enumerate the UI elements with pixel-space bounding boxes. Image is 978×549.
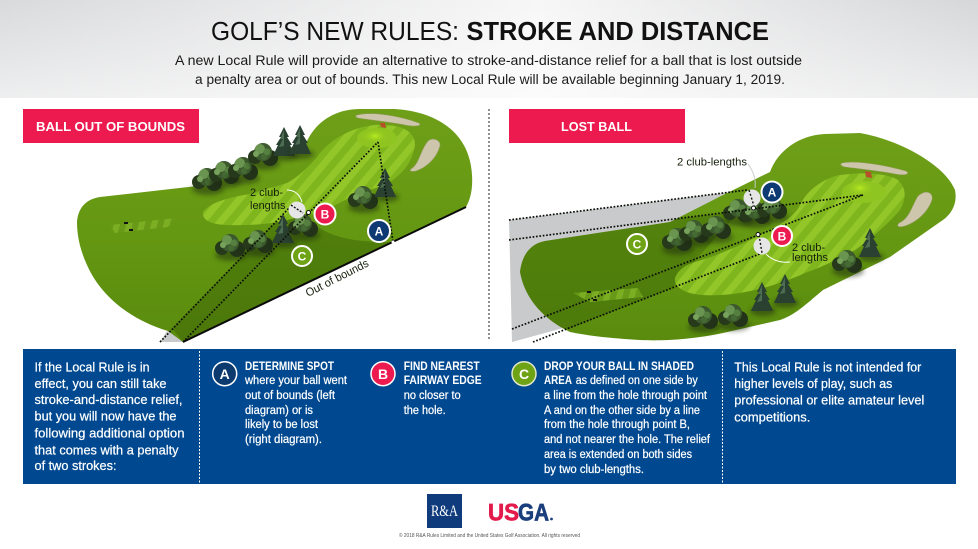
step A text: likely to be lost	[245, 419, 319, 431]
step A text: diagram) or is	[245, 405, 313, 417]
out of bounds label: Out of bounds	[304, 258, 371, 300]
copyright: © 2018 R&A Rules Limited and the United States Golf Association. All rights reserved	[399, 532, 580, 539]
flag	[865, 171, 872, 178]
flag	[380, 123, 386, 128]
step B text: FIND NEAREST	[404, 361, 480, 373]
step C icon: C	[519, 366, 529, 382]
title: STROKE AND DISTANCE	[466, 18, 769, 46]
two club-lengths label: lengths	[250, 200, 286, 212]
heading: lost ball	[509, 109, 685, 143]
step A text: (right diagram).	[245, 434, 322, 446]
heading: lost ball: LOST BALL	[561, 119, 632, 134]
logo: R&A	[427, 494, 462, 528]
step A icon	[213, 362, 237, 386]
relief boundary lines	[509, 190, 863, 342]
marker B: B	[321, 208, 330, 222]
trees	[662, 196, 884, 333]
two club-lengths label A	[677, 156, 755, 188]
step C text: by two club-lengths.	[544, 464, 644, 476]
relief boundary lines	[160, 142, 393, 342]
step B text: no closer to	[404, 390, 461, 402]
marker C	[627, 234, 647, 254]
panel text: intro	[34, 360, 184, 473]
panel text: scope note: professional or elite amateur level	[734, 392, 924, 408]
putting green	[842, 179, 886, 203]
intro text: a penalty area or out of bounds. This new Local Rule will be available beginning January 1, 2019.	[195, 72, 785, 87]
step A text: out of bounds (left	[245, 390, 336, 402]
marker B	[772, 226, 792, 246]
panel text: scope note: competitions.	[734, 410, 810, 424]
diagram: lost ball course	[509, 133, 956, 343]
blue info panel	[23, 349, 956, 484]
panel text: intro: If the Local Rule is in	[34, 360, 150, 374]
step B icon: B	[378, 366, 388, 382]
logo: USGA	[488, 500, 553, 526]
step C text: and not nearer the hole. The relief	[544, 434, 711, 446]
step C text: AREA	[544, 375, 572, 387]
step C text: as defined on one side by	[576, 375, 698, 387]
step B icon	[371, 362, 395, 386]
logo: USGA: GA	[518, 500, 549, 526]
panel text: intro: of two strokes:	[34, 458, 116, 473]
club-length circle	[288, 202, 394, 244]
intro text: A new Local Rule will provide an alternative to stroke-and-distance relief for a ball that is lost outside	[175, 53, 802, 68]
panel text: intro: that comes with a penalty	[34, 442, 179, 458]
two club-lengths label B	[766, 242, 828, 264]
title	[211, 18, 769, 46]
fairway	[675, 173, 905, 295]
marker C: C	[633, 238, 642, 252]
step B text: FAIRWAY EDGE	[404, 375, 482, 387]
tee box	[110, 218, 176, 233]
panel text: intro: effect, you can still take	[34, 376, 166, 391]
two club-lengths label B: 2 club-	[792, 242, 825, 254]
logo: USGA: US	[488, 500, 519, 526]
shaded relief area	[520, 214, 732, 330]
shaded relief area	[172, 205, 393, 342]
two club-lengths label	[250, 187, 302, 212]
step A icon: A	[220, 366, 230, 382]
panel text: scope note	[734, 360, 924, 424]
course turf	[520, 133, 956, 340]
putting green	[357, 128, 397, 148]
panel text: scope note: This Local Rule is not intended for	[734, 360, 922, 374]
panel text: scope note: higher levels of play, such as	[734, 376, 892, 391]
title: GOLF’S NEW RULES:	[211, 18, 459, 46]
out of bounds line	[183, 207, 466, 342]
step C text: a line from the hole through point	[544, 390, 708, 402]
bunkers	[841, 162, 932, 227]
marker C	[292, 246, 312, 266]
panel text: intro: stroke-and-distance relief,	[34, 392, 182, 407]
step C text: A and on the other side by a line	[544, 405, 700, 417]
marker B: B	[778, 230, 787, 244]
trees	[192, 125, 399, 261]
club-length circle at B	[754, 232, 770, 254]
step C text: DROP YOUR BALL IN SHADED	[544, 361, 694, 373]
tee box	[573, 288, 643, 302]
heading: ball out of bounds: BALL OUT OF BOUNDS	[36, 119, 185, 134]
marker C: C	[298, 250, 307, 264]
step B text	[404, 361, 482, 417]
marker A: A	[768, 186, 777, 200]
step C text	[544, 361, 711, 476]
heading: ball out of bounds	[23, 109, 199, 143]
marker B	[314, 204, 336, 224]
step A text	[244, 361, 348, 446]
panel text: intro: but you will now have the	[34, 408, 176, 424]
panel text: intro: following additional option	[34, 426, 184, 440]
two club-lengths label B: lengths	[792, 252, 828, 264]
header band	[0, 0, 978, 98]
step B text: the hole.	[404, 405, 446, 417]
club-length circle at A	[744, 190, 760, 210]
step A text: DETERMINE SPOT	[245, 361, 334, 373]
marker A	[762, 182, 782, 202]
marker A	[368, 220, 390, 242]
fairway	[203, 125, 415, 225]
bunkers	[356, 114, 440, 171]
diagram: ball out of bounds course	[77, 109, 472, 342]
logo: R&A: R&A	[431, 503, 459, 520]
relief area grey extension	[509, 190, 747, 342]
step C text: area is extended on both sides	[544, 449, 692, 461]
relief area grey extension	[160, 331, 204, 342]
step C text: from the hole through point B,	[544, 419, 690, 431]
course turf	[77, 109, 472, 342]
intro text	[175, 53, 802, 87]
step C icon	[512, 362, 536, 386]
two club-lengths label: 2 club-	[250, 187, 283, 199]
step A text: where your ball went	[244, 375, 348, 387]
two club-lengths label A: 2 club-lengths	[677, 156, 747, 168]
marker A: A	[375, 224, 384, 238]
